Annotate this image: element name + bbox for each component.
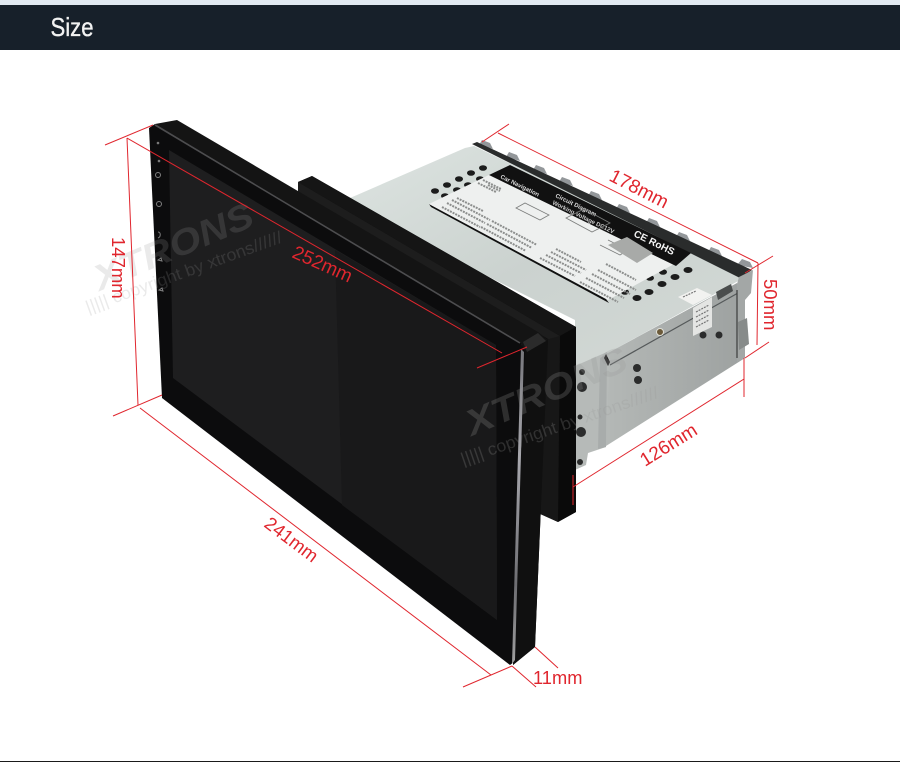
bezel top and right depth [155,120,548,665]
bezel front [149,124,525,665]
rear rail [472,142,752,278]
dimension: 50mm chassis height [745,263,781,358]
sticker wiring table lines [442,180,636,302]
header bar [0,0,900,50]
chassis side face [606,283,745,446]
watermark copyright: ||||| copyright by xtrons////// [458,383,661,469]
circuit diagram sticker: Working Voltage DC12V [551,200,615,236]
front bracket [575,352,610,470]
screen [169,150,497,620]
sticker heading text: Circuit Diagram [554,193,597,218]
watermark logo: XTRONS [457,338,633,444]
dimension: 252mm width: 252mm [289,242,355,287]
corner highlight [523,333,546,352]
bezel right highlight [512,349,524,664]
watermark: lower right [457,338,661,469]
dimension: 147mm height [105,125,162,416]
dimension: 241mm bottom edge [140,408,512,687]
watermark copyright: ||||| copyright by xtrons////// [83,228,285,317]
dimension: 178mm chassis depth [482,124,773,273]
dimension: 11mm depth: 11mm [533,667,582,688]
sticker logo text: Car Navigation [499,174,540,199]
heading: Size: Size [50,12,94,42]
side touch buttons [156,142,163,291]
watermark logo: XTRONS [85,194,260,299]
dimension: 147mm height: 147mm [108,237,129,299]
screen reflection [335,250,497,620]
top vent holes [431,165,692,301]
CE RoHS mark: CE RoHS [632,229,676,258]
front panel [149,120,548,665]
dimension: 241mm bottom edge: 241mm [261,512,323,566]
right end plate [737,270,753,362]
metal chassis [345,140,753,470]
rear mounting frame [298,176,576,522]
bottom rule [0,761,900,762]
bracket holes [576,332,722,465]
dimension: 50mm chassis height: 50mm [760,279,781,330]
serial stickers [678,288,712,336]
dimension: 178mm chassis depth: 178mm [606,166,672,213]
watermark: top left [83,194,285,317]
rear rail teeth [479,140,753,268]
circuit diagram sticker [429,165,691,303]
chassis top face [345,146,740,366]
bezel top highlight [155,125,520,343]
dimension: 126mm chassis width: 126mm [637,420,701,471]
side screw [656,328,664,336]
device: car stereo head unit [149,120,753,665]
dimension: 126mm chassis width [573,358,744,505]
dimension: 11mm depth [512,647,582,688]
dimension: 252mm width [127,138,527,368]
